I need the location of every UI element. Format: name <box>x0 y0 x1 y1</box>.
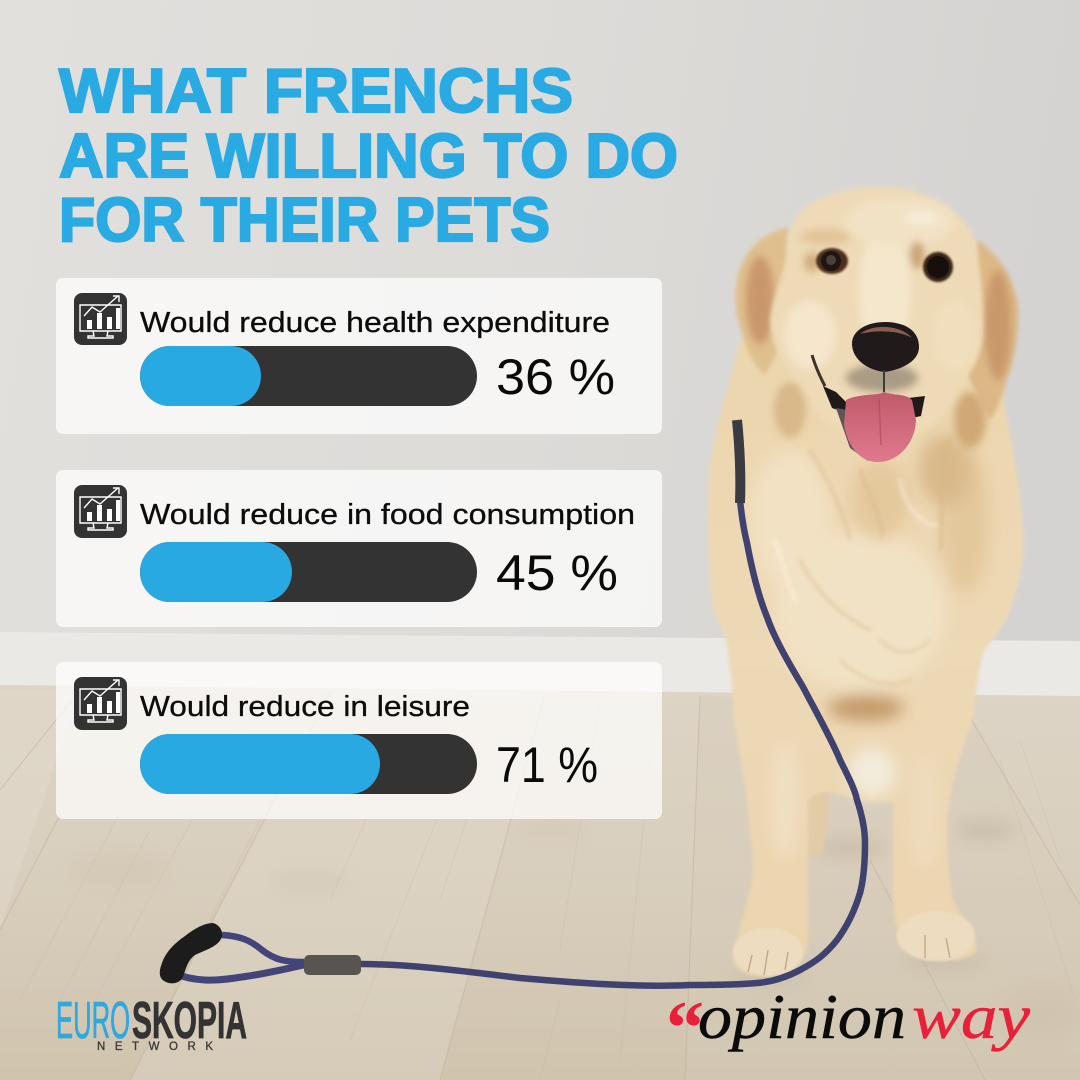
dog fur strands <box>775 440 950 684</box>
panel: health expenditure <box>56 278 662 434</box>
dog mouth <box>812 355 925 462</box>
label: Would reduce in food consumption <box>140 499 635 531</box>
label: Would reduce health expenditure <box>140 307 610 339</box>
logo: OpinionWay <box>666 981 1031 1070</box>
dog eyes <box>816 248 953 282</box>
dog ear shading <box>746 256 1011 380</box>
dog photo illustration <box>707 187 1024 983</box>
title: WHAT FRENCHS <box>59 57 573 126</box>
dog leash and handle <box>160 420 865 986</box>
logo: OpinionWay: “ <box>666 986 704 1070</box>
icon: chart on monitor <box>74 293 127 345</box>
title <box>59 57 678 255</box>
title: ARE WILLING TO DO <box>59 122 678 191</box>
dog nose <box>852 322 919 392</box>
logo: OpinionWay: way <box>912 981 1031 1052</box>
icon: chart on monitor <box>74 485 127 538</box>
bar: 45 percent <box>140 542 477 602</box>
label: Would reduce in leisure <box>140 691 470 723</box>
panel: leisure <box>56 662 662 819</box>
value: 36 % <box>496 349 615 405</box>
logo: Euroskopia Network: SKOPIA <box>132 992 247 1050</box>
dog head <box>770 187 983 445</box>
logo: OpinionWay: opinion <box>698 981 906 1052</box>
dog paws <box>733 911 975 976</box>
title: FOR THEIR PETS <box>59 186 550 255</box>
logo: Euroskopia Network: EURO <box>56 992 130 1050</box>
dog muzzle <box>846 364 918 392</box>
dog face shading <box>774 198 986 448</box>
dog ears <box>735 227 1018 420</box>
dog body and front legs <box>707 340 1024 976</box>
dog floor shadow <box>730 820 1015 983</box>
dog back leg <box>806 785 830 856</box>
value: 45 % <box>496 545 618 601</box>
value: 71 % <box>496 737 598 793</box>
bar: 36 percent <box>140 346 477 406</box>
dog fur shading <box>750 434 989 870</box>
panel: food consumption <box>56 470 662 627</box>
logo: Euroskopia Network: NETWORK <box>97 1041 213 1053</box>
icon: chart on monitor <box>74 677 127 730</box>
bar: 71 percent <box>140 734 477 794</box>
